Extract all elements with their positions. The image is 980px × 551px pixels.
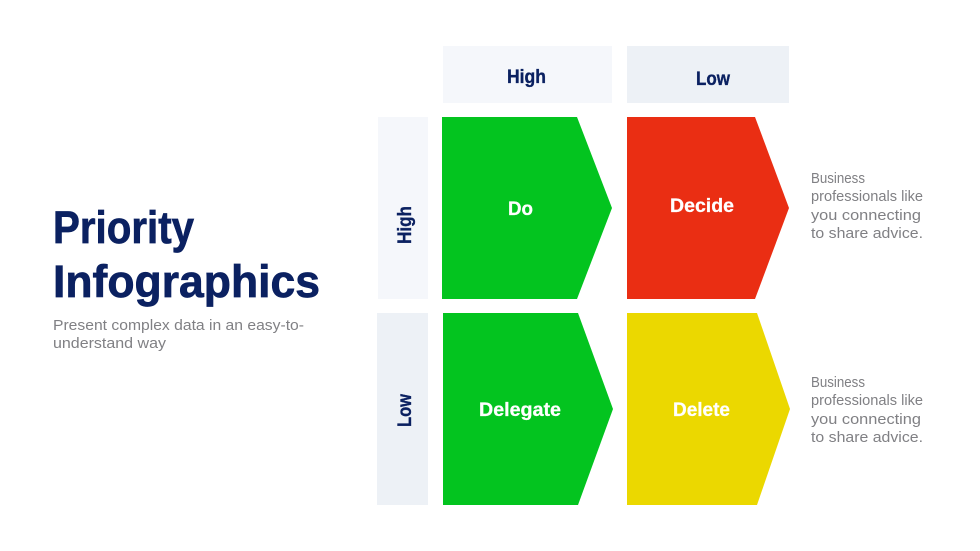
subtitle: Present complex data in an easy-to- bbox=[53, 318, 304, 334]
title: Priority bbox=[53, 202, 194, 253]
row header: High bbox=[378, 117, 428, 299]
arrow: Delegate bbox=[443, 313, 613, 505]
arrow: Delete: Delete bbox=[673, 400, 730, 421]
description: bottom row bbox=[811, 375, 923, 446]
column header: High bbox=[443, 46, 612, 103]
title: Infographics bbox=[53, 256, 320, 307]
arrow: Delegate: Delegate bbox=[479, 400, 561, 421]
arrow: Do bbox=[442, 117, 612, 299]
description: top row: you connecting bbox=[811, 208, 921, 224]
arrow: Delete bbox=[627, 313, 790, 505]
subtitle: understand way bbox=[53, 336, 167, 352]
column header: High: High bbox=[507, 67, 546, 88]
row header: Low bbox=[377, 313, 428, 505]
row header: High: High bbox=[395, 206, 416, 244]
description: top row: Business bbox=[811, 171, 865, 187]
description: bottom row: to share advice. bbox=[811, 430, 923, 446]
description: bottom row: Business bbox=[811, 375, 865, 391]
arrow: Do: Do bbox=[508, 199, 533, 220]
arrow: Decide: Decide bbox=[670, 196, 734, 217]
description: top row bbox=[811, 171, 923, 242]
description: bottom row: professionals like bbox=[811, 393, 923, 409]
column header: Low bbox=[627, 46, 789, 103]
row header: Low: Low bbox=[395, 394, 416, 427]
description: top row: professionals like bbox=[811, 189, 923, 205]
subtitle bbox=[53, 318, 304, 352]
arrow: Decide bbox=[627, 117, 789, 299]
description: top row: to share advice. bbox=[811, 226, 923, 242]
description: bottom row: you connecting bbox=[811, 412, 921, 428]
title bbox=[53, 202, 320, 307]
column header: Low: Low bbox=[696, 69, 730, 90]
